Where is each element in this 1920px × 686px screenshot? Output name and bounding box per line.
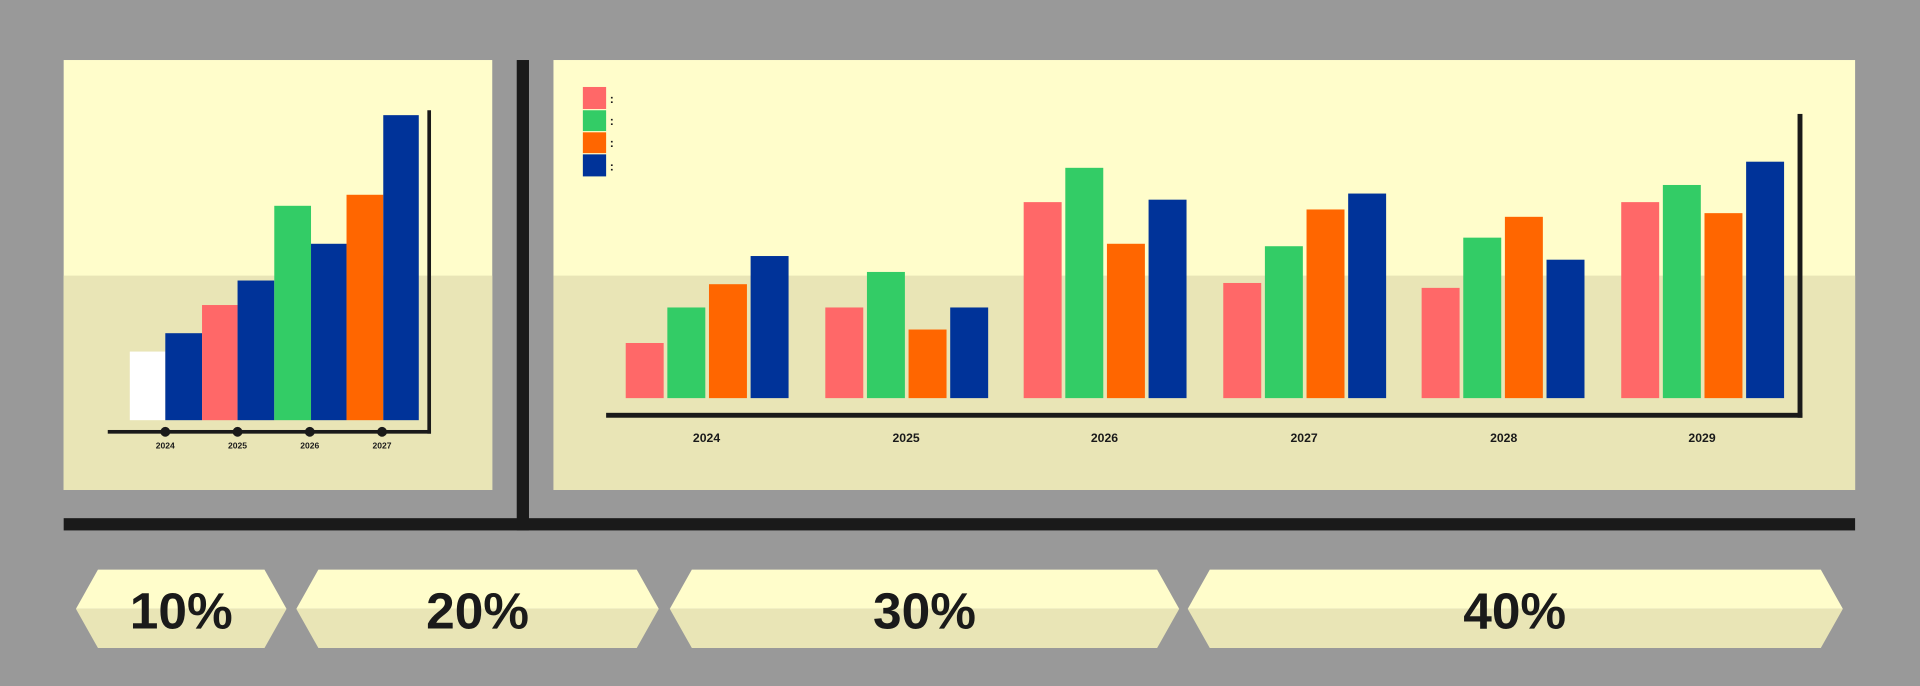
bars: 2024 (626, 256, 789, 398)
year labels: 2027 (1290, 431, 1318, 445)
axis: left chart timeline: 2024 (156, 440, 175, 450)
year labels: 2029 (1688, 431, 1716, 445)
year labels: 2028 (1490, 431, 1517, 445)
panel: right grouped bar chart (553, 60, 1855, 490)
badge: 20%: 20% (426, 581, 529, 639)
divider: horizontal black bar (64, 518, 1855, 530)
year labels (693, 431, 1716, 445)
badge: 20% (296, 570, 659, 648)
legend: : (610, 92, 614, 106)
legend: : (610, 114, 614, 128)
bars: 2029 (1621, 162, 1784, 398)
divider: vertical black bar (517, 60, 529, 530)
year labels: 2025 (893, 431, 920, 445)
axis: left chart timeline: 2027 (373, 440, 392, 450)
legend (583, 87, 614, 176)
badge: 30%: 30% (873, 581, 976, 639)
year labels: 2026 (1091, 431, 1118, 445)
axis: left chart timeline: 2025 (228, 440, 247, 450)
bars: 2026 (1024, 168, 1187, 398)
panel: left chart (64, 60, 492, 490)
axis: left chart timeline (108, 110, 431, 450)
badge: 30% (670, 570, 1179, 648)
badge: 10% (76, 570, 287, 648)
bar chart: left stepped bars (130, 115, 419, 420)
bars: 2027 (1223, 194, 1386, 398)
legend: : (610, 159, 614, 173)
legend: : (610, 136, 614, 150)
axis: right chart (606, 114, 1802, 418)
badge: 10%: 10% (130, 581, 233, 639)
year labels: 2024 (693, 431, 720, 445)
axis: left chart timeline: 2026 (300, 440, 320, 450)
bars: 2025 (825, 272, 988, 398)
bars: 2028 (1422, 217, 1584, 398)
badge: 40%: 40% (1463, 581, 1566, 639)
badge: 40% (1188, 570, 1843, 648)
